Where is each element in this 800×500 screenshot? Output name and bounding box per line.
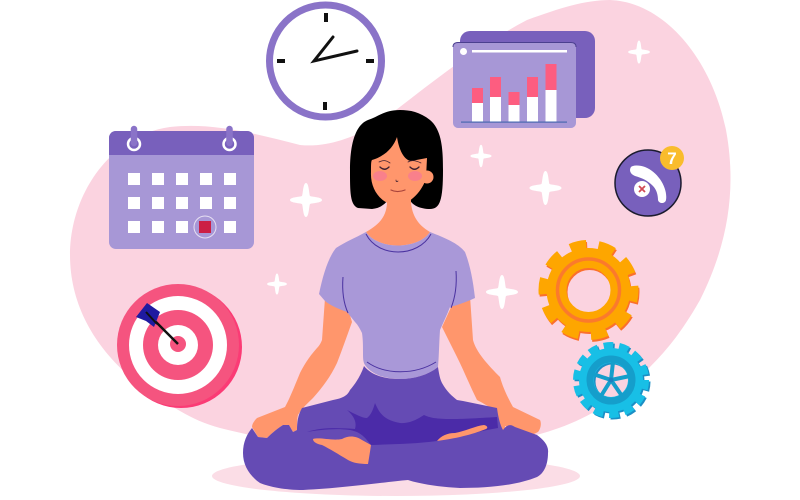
icon: calendar (109, 129, 254, 249)
cheeks (373, 171, 422, 181)
trousers shadow (307, 403, 498, 445)
right foot (437, 425, 487, 441)
background blob (70, 0, 731, 452)
right arm (442, 296, 541, 437)
icon: clock (270, 5, 382, 117)
left foot (313, 436, 371, 464)
notification count: 7 (667, 149, 677, 168)
hair (350, 110, 443, 209)
sparkles (267, 40, 650, 309)
icon: bar chart window (453, 31, 595, 128)
face (371, 137, 427, 205)
eyes and brows (379, 161, 421, 192)
trousers (243, 366, 548, 490)
person meditating (243, 110, 548, 490)
icon: missed call badge (615, 146, 684, 216)
shirt (319, 232, 475, 379)
shirt seams (343, 234, 456, 372)
icon: blue gear (576, 346, 647, 416)
icon: target with arrow (117, 284, 242, 408)
ground shadow (212, 456, 580, 496)
left arm (252, 298, 352, 438)
icon: orange gear (544, 245, 634, 337)
ear (420, 170, 434, 184)
neck (366, 195, 430, 246)
bar chart (461, 64, 567, 123)
